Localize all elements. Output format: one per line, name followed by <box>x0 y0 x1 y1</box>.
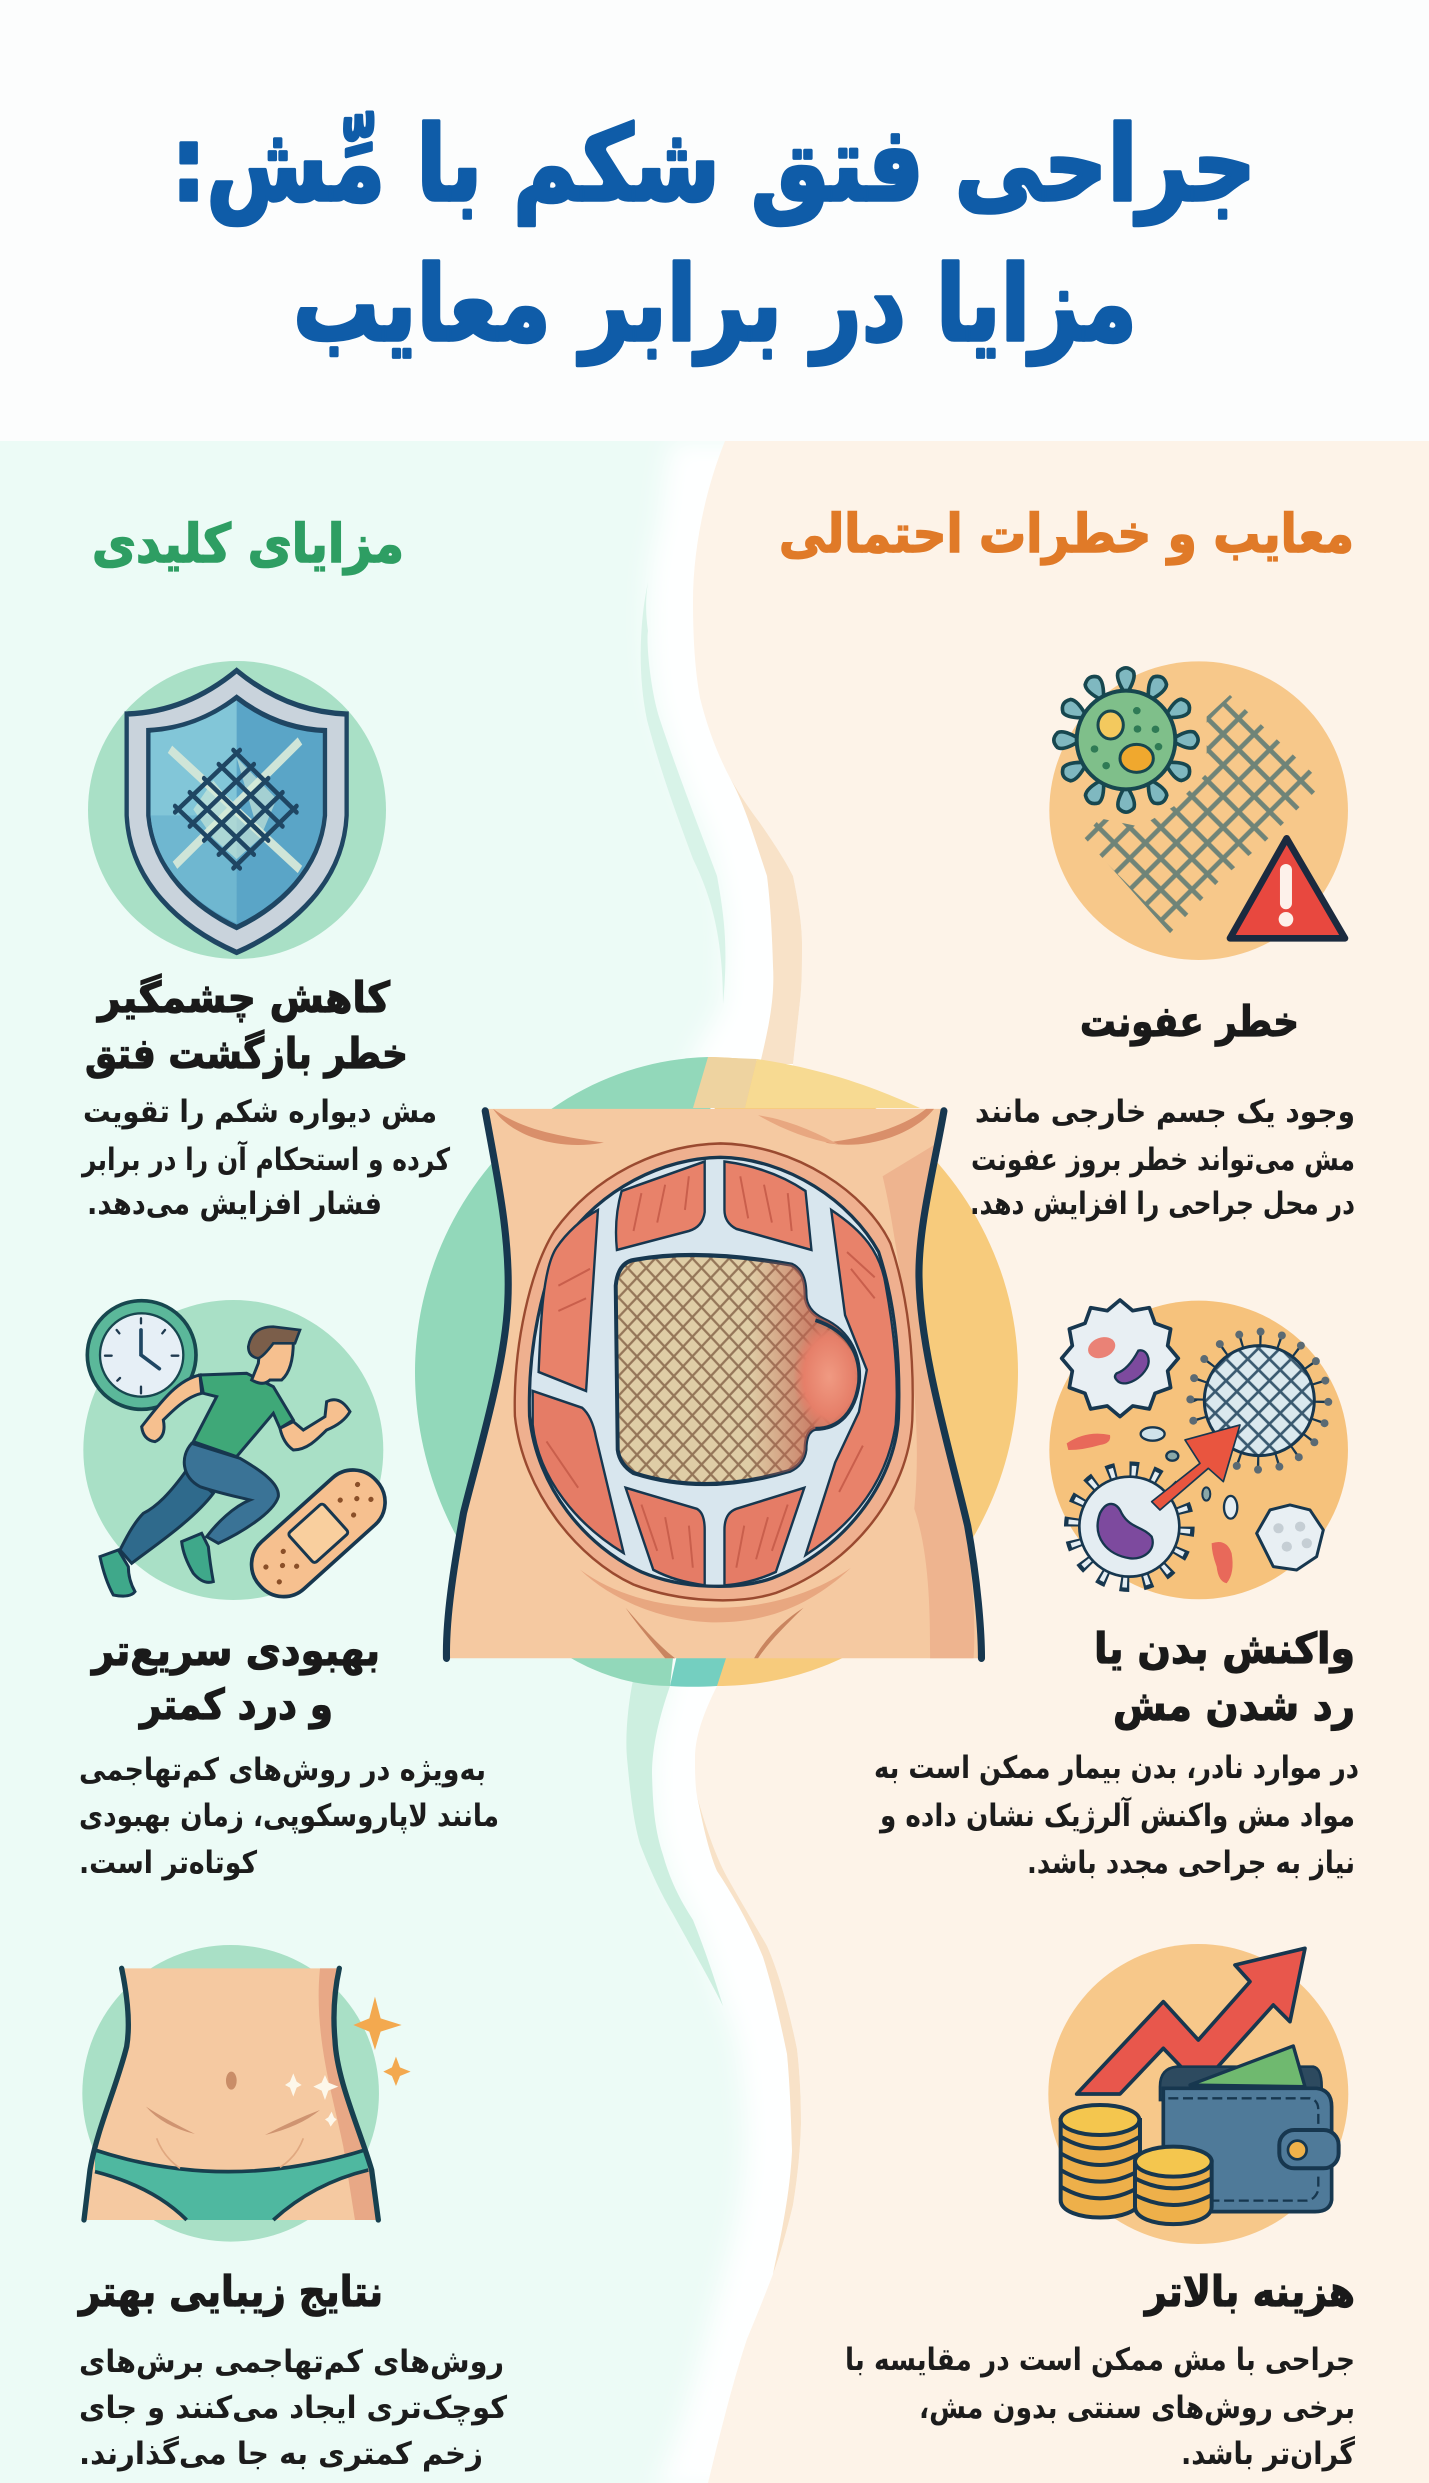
icon: shield with mesh <box>88 661 386 959</box>
muscle lower left side <box>533 1391 624 1553</box>
heading <box>90 1626 380 1730</box>
muscle right side <box>806 1210 897 1555</box>
muscle left side <box>539 1210 598 1391</box>
torso outline right <box>919 1111 981 1658</box>
text block: برخی روش‌های سنتی بدون مش، <box>919 2390 1355 2426</box>
muscle bottom-left <box>626 1488 705 1585</box>
torso outline left <box>446 1111 508 1658</box>
text block: کوتاه‌تر است. <box>79 1845 258 1881</box>
text block: نیاز به جراحی مجدد باشد. <box>1027 1845 1355 1881</box>
muscle bottom-right <box>724 1488 804 1585</box>
heading: key benefits: مزایای کلیدی <box>92 514 404 575</box>
heading: هزینه بالاتر <box>1143 2267 1355 2317</box>
text block: مش دیواره شکم را تقویت <box>83 1094 437 1130</box>
text block <box>79 1752 499 1881</box>
text block: کوچک‌تری ایجاد می‌کنند و جای <box>79 2390 508 2426</box>
panel: risk 2, body reaction or rejection <box>874 1300 1359 1881</box>
text block: وجود یک جسم خارجی مانند <box>975 1094 1355 1130</box>
text block: مانند لاپاروسکوپی، زمان بهبودی <box>79 1798 499 1834</box>
torso skin <box>446 1109 981 1658</box>
text block: به‌ویژه در روش‌های کم‌تهاجمی <box>79 1752 486 1788</box>
text block: فشار افزایش می‌دهد. <box>87 1186 382 1222</box>
rib creases <box>493 1109 604 1145</box>
heading <box>85 973 408 1079</box>
text block: روش‌های کم‌تهاجمی برش‌های <box>79 2344 504 2380</box>
text block <box>79 2344 508 2472</box>
mesh fade to hernia <box>616 1255 859 1484</box>
heading: کاهش چشمگیر <box>96 973 391 1023</box>
heading: بهبودی سریع‌تر <box>90 1626 380 1676</box>
icon: immune cells attacking mesh <box>1049 1300 1348 1599</box>
mesh patch <box>616 1255 859 1484</box>
panel: risk 1, infection <box>970 661 1355 1222</box>
panel: benefit 3, better cosmetic results <box>77 1945 508 2472</box>
muscle top-right <box>724 1162 811 1250</box>
central circle backdrop <box>415 1057 1018 1687</box>
heading: واکنش بدن یا <box>1094 1624 1355 1674</box>
text block: جراحی با مش ممکن است در مقایسه با <box>845 2342 1355 2378</box>
icon: rising arrow, wallet and coins <box>1048 1944 1348 2244</box>
heading: drawbacks and risks: معایب و خطرات احتمالی <box>779 504 1354 565</box>
heading: رد شدن مش <box>1113 1681 1355 1730</box>
title: مزایا در برابر معایب <box>293 243 1137 365</box>
panel: benefit 1, reduced recurrence <box>80 661 451 1222</box>
title <box>171 103 1256 365</box>
panel: risk 3, higher cost <box>845 1944 1356 2472</box>
text block <box>80 1094 451 1222</box>
heading <box>1094 1624 1355 1730</box>
heading: خطر عفونت <box>1080 997 1299 1047</box>
muscle fibres <box>547 1176 875 1568</box>
text block: گران‌تر باشد. <box>1181 2435 1356 2472</box>
text block: مواد مش واکنش آلرژیک نشان داده و <box>878 1796 1355 1834</box>
text block <box>845 2342 1356 2472</box>
text block <box>874 1750 1359 1881</box>
inner opening with fascia <box>529 1157 899 1586</box>
title: جراحی فتق شکم با مِّش: <box>171 103 1256 226</box>
heading: و درد کمتر <box>138 1680 333 1730</box>
text block: زخم کمتری به جا می‌گذارند. <box>79 2435 483 2472</box>
icon: germ, mesh and warning <box>1049 661 1348 960</box>
central illustration: abdomen with mesh and hernia <box>446 1109 981 1658</box>
hernia bulge <box>793 1326 858 1428</box>
heading: خطر بازگشت فتق <box>85 1029 408 1079</box>
text block: کرده و استحکام آن را در برابر <box>80 1140 451 1178</box>
panel: benefit 2, faster recovery <box>79 1300 499 1881</box>
muscle top-left <box>616 1162 705 1250</box>
icon: runner, clock and bandage <box>83 1300 398 1609</box>
icon: waist with sparkles <box>82 1945 411 2242</box>
surgical opening outer ring <box>515 1143 913 1600</box>
heading: نتایج زیبایی بهتر <box>77 2267 383 2317</box>
text block <box>970 1094 1355 1222</box>
